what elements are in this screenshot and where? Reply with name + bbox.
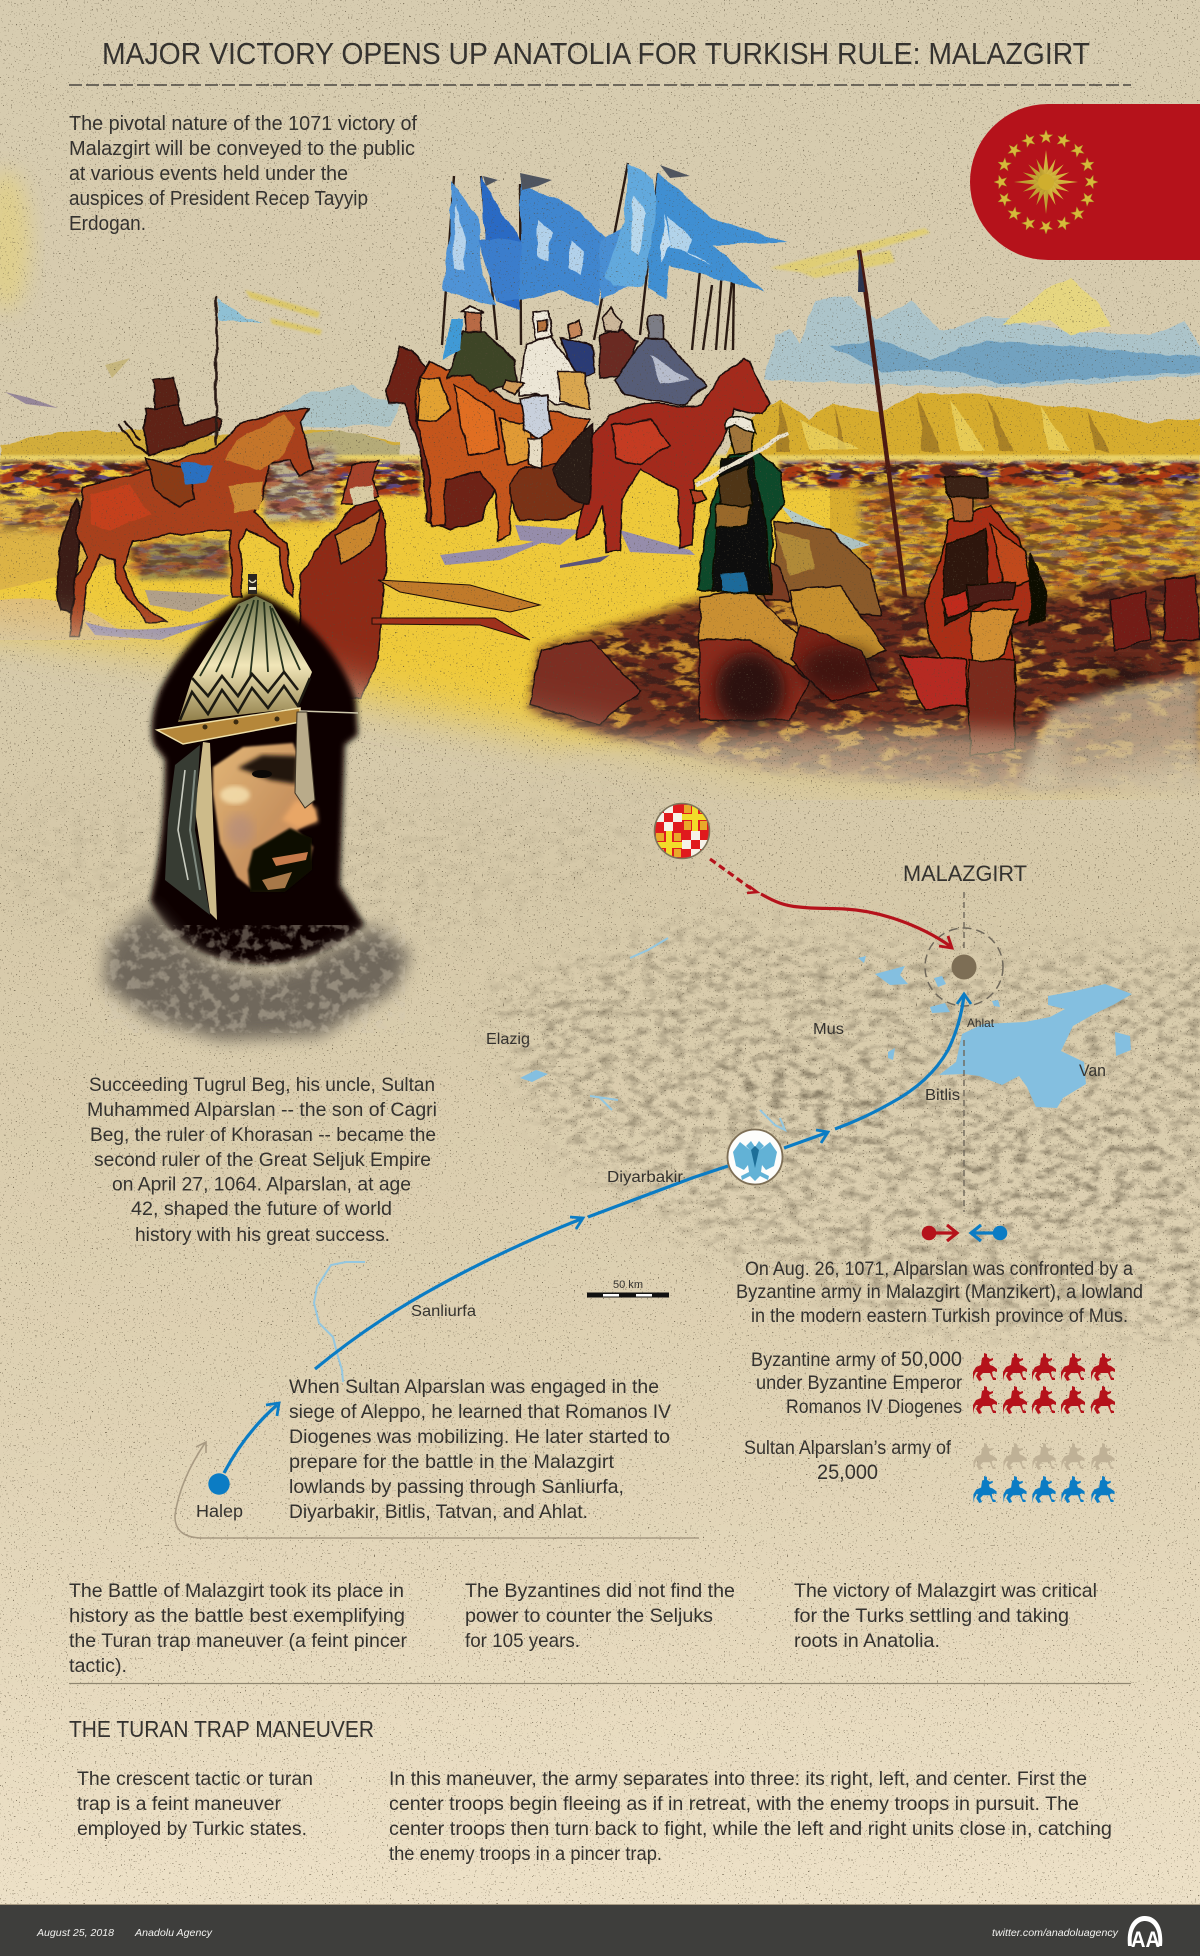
footer twitter handle: twitter.com/anadoluagency: [992, 1927, 1119, 1939]
painted ground: [0, 445, 1200, 800]
Byzantine route arrow: [710, 859, 952, 948]
text: Aug. 26 confrontation: Byzantine army in Malazgirt (Manzikert), a lowland: [736, 1282, 1143, 1303]
text: Turan trap example: The Battle of Malazgirt took its place in: [69, 1580, 404, 1602]
text: Turan trap example: history as the battle best exemplifying: [69, 1605, 405, 1627]
Halep start dot: [208, 1473, 230, 1495]
face: [213, 743, 317, 890]
fallen lances on the ground: [372, 580, 540, 640]
orange horse: [415, 360, 590, 540]
nose guard: [295, 712, 315, 808]
text: Aug. 26 confrontation: On Aug. 26, 1071, Alparslan was confronted by a: [745, 1259, 1133, 1280]
bottom dust and dark shadow: [560, 645, 1200, 800]
text: siege of Aleppo: Diyarbakir, Bitlis, Tatvan, and Ahlat.: [289, 1501, 588, 1523]
Lake Van: [939, 984, 1132, 1108]
text: crescent tactic: employed by Turkic states.: [77, 1818, 307, 1840]
text: maneuver explanation: center troops begin fleeing as if in retreat, with the enemy troops in pursuit. The: [389, 1793, 1079, 1815]
Seljuk eagle emblem: [728, 1130, 782, 1184]
battle painting: [0, 163, 1200, 800]
label: Malazgirt: MALAZGIRT: [903, 861, 1027, 886]
text: Turan trap example: tactic).: [69, 1655, 127, 1677]
map: lakes and rivers: [314, 938, 1132, 1382]
rider green cloak: [447, 332, 517, 392]
rider in grey: [615, 338, 705, 405]
blue-violet ground shadows: [85, 505, 870, 640]
mountains: [0, 392, 1200, 462]
distant crowd and hill mottling: [0, 442, 1200, 594]
map place labels: Sanliurfa: [411, 1303, 476, 1320]
red horse: [575, 358, 770, 552]
rider in white: [520, 335, 588, 405]
map place labels: Halep: [196, 1501, 243, 1521]
left horseman: [58, 296, 313, 637]
text: siege of Aleppo: [289, 1376, 671, 1523]
text: Alparslan army size: [744, 1438, 952, 1484]
banner pennants: [483, 165, 690, 190]
icons: Byzantine cavalry: [973, 1353, 1115, 1414]
text: crescent tactic: The crescent tactic or turan: [77, 1768, 313, 1790]
text: Turan trap example: the Turan trap maneuver (a feint pincer: [69, 1630, 407, 1652]
text: crescent tactic: [77, 1768, 313, 1840]
facial features: [220, 755, 318, 892]
sky colour strokes and clouds: [0, 170, 1200, 428]
text: Alparslan biography: Succeeding Tugrul Beg, his uncle, Sultan: [89, 1074, 435, 1096]
text: maneuver explanation: [389, 1768, 1112, 1865]
text: Turks in Anatolia: The victory of Malazgirt was critical: [794, 1580, 1097, 1602]
Seljuk route arrows: [224, 994, 971, 1473]
text: Aug. 26 confrontation: in the modern eastern Turkish province of Mus.: [751, 1306, 1128, 1327]
standing figure in green: [690, 416, 787, 595]
text: siege of Aleppo: lowlands by passing through Sanliurfa,: [289, 1476, 624, 1498]
red-coated warrior: [900, 477, 1047, 755]
central horsemen: [386, 305, 770, 552]
rider in maroon: [600, 330, 638, 378]
chain mail shoulders: [104, 905, 410, 1040]
small lakes: [520, 956, 1131, 1082]
dark brown horse: [386, 348, 500, 530]
text: Alparslan biography: history with his great success.: [135, 1224, 390, 1246]
intro text: auspices of President Recep Tayyip: [69, 188, 368, 210]
foreground mass base with mottling: [520, 560, 1200, 800]
map place labels: Van: [1079, 1061, 1106, 1080]
intro text: Erdogan.: [69, 213, 146, 235]
map place labels: Bitlis: [925, 1087, 960, 1104]
text: crescent tactic: trap is a feint maneuver: [77, 1793, 281, 1815]
map place labels: Elazig: [486, 1031, 530, 1048]
helmet finial: [248, 574, 257, 594]
scale bar: [587, 1279, 669, 1298]
text: Byzantine decline: for 105 years.: [465, 1630, 580, 1652]
map place labels: Diyarbakir: [607, 1169, 684, 1186]
distant rocks and fallen soldiers: [530, 520, 1200, 725]
text: Turks in Anatolia: [794, 1580, 1097, 1652]
scale bar: 50 km: [613, 1279, 643, 1291]
map: dashed meridian: [963, 892, 965, 1212]
robed figure beside the portrait: [300, 460, 386, 700]
text: Turks in Anatolia: roots in Anatolia.: [794, 1630, 940, 1652]
great spear: [858, 250, 905, 597]
cheek strap and hair: [165, 742, 217, 920]
text: Byzantine decline: [465, 1580, 735, 1652]
map place labels: [196, 1016, 1106, 1521]
Byzantine flag icon: [654, 803, 710, 859]
text: Alparslan army size: Sultan Alparslan’s army of: [744, 1438, 952, 1459]
map place labels: Ahlat: [967, 1016, 995, 1030]
intro text: The pivotal nature of the 1071 victory of: [69, 113, 417, 135]
text: Aug. 26 confrontation: [736, 1259, 1143, 1327]
intro text: Malazgirt will be conveyed to the public: [69, 138, 415, 160]
intro text: [69, 113, 417, 235]
text: Alparslan biography: 42, shaped the future of world: [131, 1198, 392, 1220]
text: maneuver explanation: center troops then turn back to fight, while the left and right units close in, catching: [389, 1818, 1112, 1840]
text: Byzantine decline: The Byzantines did not find the: [465, 1580, 735, 1602]
heading: Turan trap maneuver: THE TURAN TRAP MANEUVER: [69, 1716, 374, 1742]
text: Alparslan biography: second ruler of the Great Seljuk Empire: [94, 1149, 431, 1171]
legend arrows: [922, 1225, 1007, 1241]
far horse legs: [510, 464, 583, 522]
text: maneuver explanation: the enemy troops in a pincer trap.: [389, 1843, 662, 1865]
emblem: ring of stars: [994, 130, 1098, 234]
icons: Seljuk cavalry with faded half: [973, 1443, 1115, 1503]
blue banners: [442, 163, 788, 311]
text: Byzantine army size: under Byzantine Emperor: [756, 1373, 963, 1394]
text: Alparslan army size: 25,000: [817, 1461, 878, 1484]
text: Byzantine army size: [751, 1348, 963, 1418]
lance poles: [442, 163, 734, 350]
text: Turks in Anatolia: for the Turks settling and taking: [794, 1605, 1069, 1627]
text: Byzantine army size: Byzantine army of 50,000: [751, 1348, 962, 1371]
intro text: at various events held under the: [69, 163, 348, 185]
text: Byzantine army size: Romanos IV Diogenes: [786, 1397, 962, 1418]
text: siege of Aleppo: siege of Aleppo, he learned that Romanos IV: [289, 1401, 671, 1423]
text: siege of Aleppo: Diogenes was mobilizing. He later started to: [289, 1426, 670, 1448]
text: Turan trap example: [69, 1580, 407, 1677]
Anadolu Agency logo: [1128, 1916, 1162, 1952]
footer date and agency: [36, 1927, 213, 1939]
text: Alparslan biography: [87, 1074, 437, 1246]
text: siege of Aleppo: When Sultan Alparslan was engaged in the: [289, 1376, 659, 1398]
rivers: [314, 938, 785, 1382]
Anadolu Agency logo: AA: [1131, 1927, 1160, 1952]
footer date and agency: August 25, 2018: [36, 1927, 114, 1939]
helmet gold band: [157, 708, 358, 744]
emblem: sun: [1014, 150, 1078, 214]
text: Byzantine decline: power to counter the Seljuks: [465, 1605, 713, 1627]
rider in blue: [560, 337, 595, 380]
tan retreat arrow: [175, 1442, 699, 1538]
footer date and agency: Anadolu Agency: [134, 1927, 213, 1939]
text: Alparslan biography: Beg, the ruler of Khorasan -- became the: [90, 1124, 436, 1146]
map place labels: Mus: [813, 1021, 844, 1038]
portrait of Sultan Alparslan: [104, 574, 410, 1040]
text: siege of Aleppo: prepare for the battle in the Malazgirt: [289, 1451, 615, 1473]
text: maneuver explanation: In this maneuver, the army separates into three: its right, left, and center. First the: [389, 1768, 1087, 1790]
title: MAJOR VICTORY OPENS UP ANATOLIA FOR TURKISH RULE: MALAZGIRT: [102, 36, 1090, 71]
helmet ornament: [178, 596, 312, 722]
black hood: [150, 592, 365, 965]
text: Alparslan biography: on April 27, 1064. Alparslan, at age: [112, 1174, 411, 1196]
footer bar: [0, 1904, 1200, 1956]
presidential flag: [970, 104, 1200, 260]
shaded relief map texture: [14, 807, 1200, 1353]
text: Alparslan biography: Muhammed Alparslan -- the son of Cagri: [87, 1099, 437, 1121]
Malazgirt marker: [925, 928, 1003, 1006]
